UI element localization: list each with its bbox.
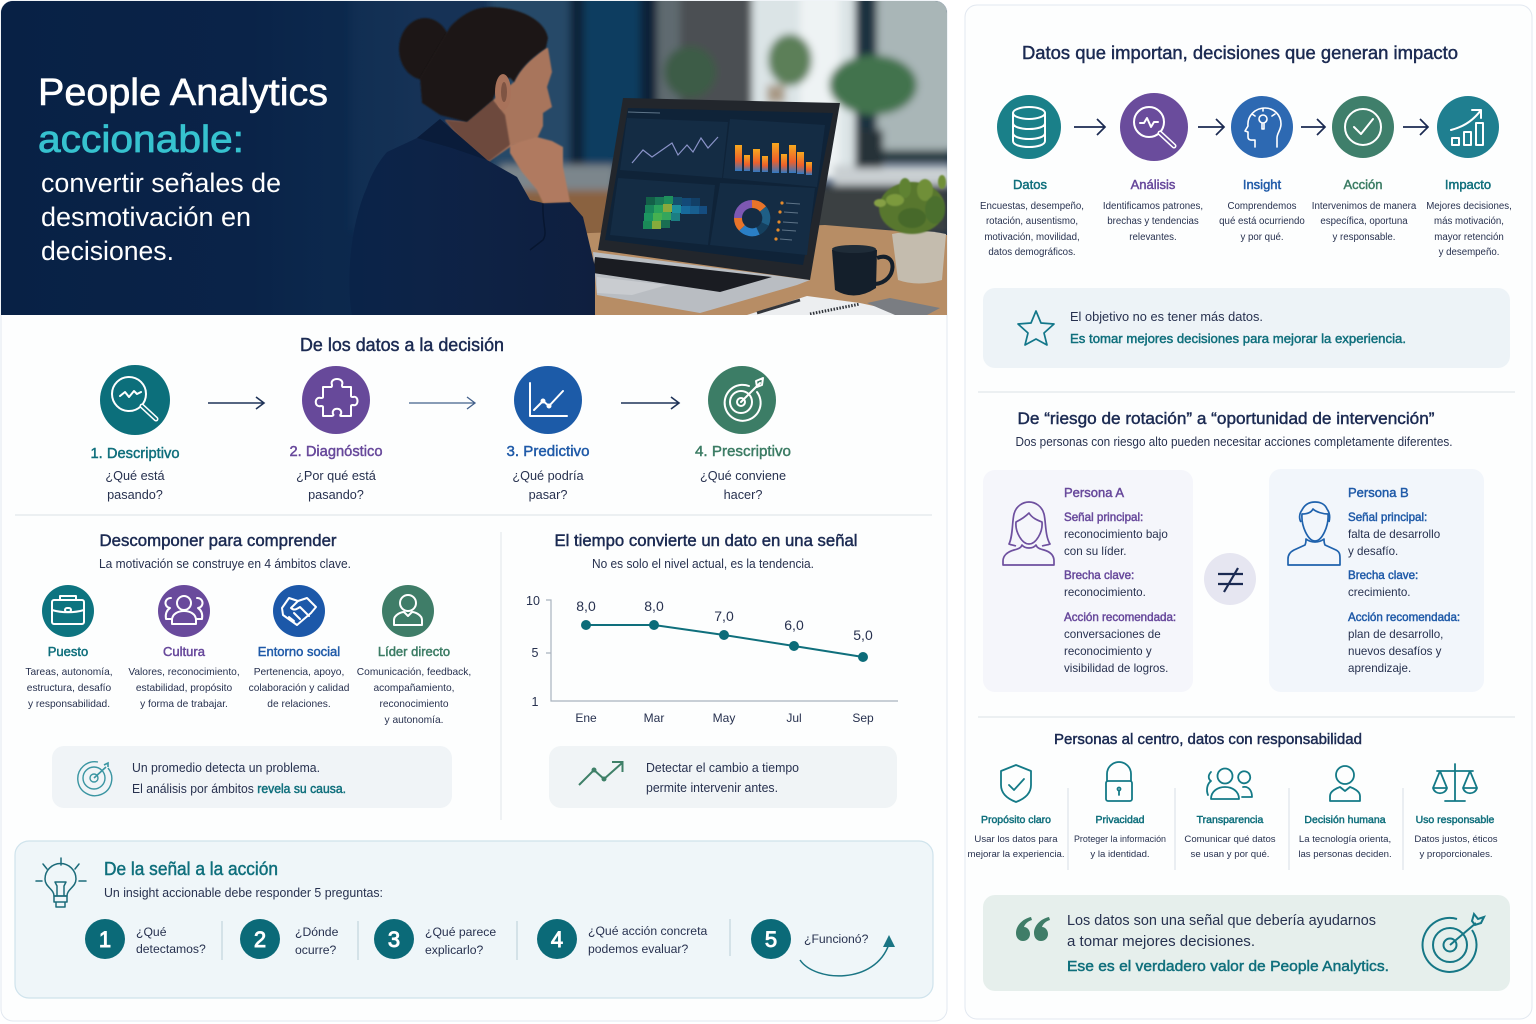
ámbito Líder directo: reconocimiento <box>379 699 449 710</box>
step 3 predictivo: pasar? <box>529 488 567 502</box>
step 1 descriptivo <box>90 365 180 502</box>
line chart: Ene <box>575 711 597 725</box>
icon: not equal <box>1204 553 1256 605</box>
step 1 descriptivo: ¿Qué está <box>105 469 166 483</box>
question 5 <box>751 919 869 959</box>
step 2 diagnóstico: ¿Por qué está <box>296 469 377 483</box>
step Insight: y por qué. <box>1240 232 1284 243</box>
principle Privacidad: Proteger la información <box>1074 834 1166 845</box>
question 4: ¿Qué acción concreta <box>588 924 707 938</box>
panel: Persona A: visibilidad de logros. <box>1064 662 1168 675</box>
heading: Descomponer para comprender <box>100 532 337 550</box>
arrow <box>1074 119 1105 135</box>
panel: Persona B <box>1269 469 1484 692</box>
step 4 prescriptivo <box>695 366 791 502</box>
step Análisis: Identificamos patrones, <box>1103 201 1203 212</box>
step Impacto: Impacto <box>1445 177 1491 192</box>
step Acción: Intervenimos de manera <box>1312 201 1417 212</box>
hair <box>399 18 451 80</box>
ámbito Puesto <box>25 585 113 710</box>
icon: quotes <box>1016 917 1050 941</box>
table <box>587 225 947 315</box>
arrow <box>1403 119 1428 135</box>
woman <box>349 7 595 316</box>
title: accionable: <box>38 119 244 161</box>
section: Descomponer para comprender <box>25 532 471 808</box>
principle Transparencia: Transparencia <box>1197 814 1264 826</box>
title: convertir señales de <box>41 168 281 198</box>
line chart <box>526 594 898 725</box>
question 4: podemos evaluar? <box>588 942 688 956</box>
ámbito Entorno social: Entorno social <box>258 644 340 659</box>
step 1 descriptivo: pasando? <box>107 488 163 502</box>
panel: Persona B: crecimiento. <box>1348 586 1410 599</box>
step Acción: Acción <box>1343 177 1383 192</box>
ámbito Entorno social: colaboración y calidad <box>249 683 350 694</box>
heading: riesgo de rotación: Dos personas con riesgo alto pueden necesitar acciones completamente diferentes. <box>1016 435 1452 449</box>
callout: objetivo: Es tomar mejores decisiones para mejorar la experiencia. <box>1070 331 1406 346</box>
panel: Persona A: conversaciones de <box>1064 628 1161 641</box>
question 3: 3 <box>388 927 400 952</box>
step Análisis: brechas y tendencias <box>1107 216 1199 227</box>
callout: promedio <box>52 746 452 808</box>
question 1: ¿Qué <box>136 925 167 939</box>
ámbito Puesto: Tareas, autonomía, <box>25 667 113 678</box>
section: Descomponer para comprender: La motivación se construye en 4 ámbitos clave. <box>99 557 351 571</box>
line chart: Jul <box>786 711 802 725</box>
step 2 diagnóstico: 2. Diagnóstico <box>290 443 382 460</box>
jacket <box>349 119 595 316</box>
panel: left card <box>1 1 947 1021</box>
step 4 prescriptivo: 4. Prescriptivo <box>695 443 791 460</box>
line chart: 10 <box>526 594 540 608</box>
line chart: 1 <box>532 695 539 709</box>
principle Privacidad: Privacidad <box>1095 814 1145 826</box>
principle Uso responsable: Uso responsable <box>1416 814 1495 826</box>
heading: riesgo de rotación: De “riesgo de rotación” a “oportunidad de intervención” <box>1018 409 1435 428</box>
section: El tiempo convierte un dato: No es solo el nivel actual, es la tendencia. <box>592 557 814 571</box>
line chart: 5,0 <box>853 627 873 643</box>
panel: Persona A <box>983 470 1193 692</box>
question 3: ¿Qué parece <box>425 925 496 939</box>
principle Propósito claro: Usar los datos para <box>974 834 1058 845</box>
step Datos: Datos <box>1013 177 1047 192</box>
panel: Persona B: Brecha clave: <box>1348 569 1418 582</box>
question 1: detectamos? <box>136 942 206 956</box>
principle Privacidad: y la identidad. <box>1090 849 1150 860</box>
step Impacto: Mejores decisiones, <box>1426 201 1512 212</box>
ámbito Líder directo <box>357 585 471 726</box>
callout: detectar <box>549 746 897 808</box>
step Insight <box>1219 96 1305 243</box>
ámbito Líder directo: y autonomía. <box>385 715 443 726</box>
panel: De la señal a la acción <box>15 841 933 998</box>
panel: Persona A: Señal principal: <box>1064 511 1143 524</box>
arrow <box>409 397 475 409</box>
ámbito Líder directo: Comunicación, feedback, <box>357 667 471 678</box>
panel: Persona B: nuevos desafíos y <box>1348 645 1442 658</box>
step Datos <box>980 95 1084 258</box>
question 5: 5 <box>765 927 777 952</box>
question 4 <box>537 919 707 959</box>
step Datos: datos demográficos. <box>988 247 1076 258</box>
callout: objetivo <box>983 288 1510 368</box>
panel: Persona B: Persona B <box>1348 485 1409 500</box>
question 2: ocurre? <box>295 943 337 957</box>
step Análisis: Análisis <box>1131 177 1176 192</box>
principle Transparencia: Comunicar qué datos <box>1184 834 1276 845</box>
step Acción <box>1312 96 1417 243</box>
principle Uso responsable: Datos justos, éticos <box>1414 834 1498 845</box>
principle Propósito claro: mejorar la experiencia. <box>968 849 1064 860</box>
step Insight: qué está ocurriendo <box>1219 216 1305 227</box>
step Insight: Comprendemos <box>1228 201 1297 212</box>
ámbito Cultura: y forma de trabajar. <box>140 699 228 710</box>
plant <box>874 175 946 284</box>
line chart: 7,0 <box>714 608 734 624</box>
callout: cita final <box>983 895 1510 991</box>
callout: promedio: El análisis por ámbitos revela su causa. <box>132 782 346 796</box>
question 2: 2 <box>254 927 266 952</box>
ámbito Cultura: Cultura <box>163 644 206 659</box>
panel: De la señal a la acción: De la señal a la acción <box>104 859 278 879</box>
callout: promedio: Un promedio detecta un problema. <box>132 761 320 775</box>
ámbito Cultura: Valores, reconocimiento, <box>128 667 240 678</box>
panel: Persona B: Señal principal: <box>1348 511 1427 524</box>
mug <box>832 245 893 296</box>
line chart: 8,0 <box>576 598 596 614</box>
line chart: Sep <box>852 711 874 725</box>
callout: cita final: Los datos son una señal que debería ayudarnos <box>1067 913 1376 929</box>
line chart: 6,0 <box>784 617 804 633</box>
panel: Persona A: con su líder. <box>1064 545 1127 558</box>
panel: Persona B: y desafío. <box>1348 545 1398 558</box>
arrow <box>208 397 264 409</box>
step Insight: Insight <box>1243 177 1282 192</box>
title: decisiones. <box>41 236 174 266</box>
callout: objetivo: El objetivo no es tener más datos. <box>1070 309 1263 324</box>
heading: El tiempo convierte un dato en una señal <box>554 532 858 550</box>
step 2 diagnóstico: pasando? <box>308 488 364 502</box>
panel: Persona A: Persona A <box>1064 485 1124 500</box>
question 3: explicarlo? <box>425 943 483 957</box>
heading: right panel title: Datos que importan, decisiones que generan impacto <box>1022 43 1458 63</box>
title <box>38 72 328 266</box>
step 4 prescriptivo: ¿Qué conviene <box>700 469 786 483</box>
question 2: ¿Dónde <box>295 925 339 939</box>
hero banner <box>0 0 957 316</box>
heading: De los datos a la decisión <box>300 335 504 355</box>
ámbito Entorno social <box>249 585 350 710</box>
step Datos: motivación, movilidad, <box>984 232 1080 243</box>
principle Decisión humana: Decisión humana <box>1304 814 1386 826</box>
heading: riesgo de rotación <box>1016 409 1452 449</box>
step 3 predictivo <box>506 366 590 502</box>
section: Personas al centro <box>968 731 1498 870</box>
ámbito Entorno social: Pertenencia, apoyo, <box>254 667 344 678</box>
line chart: Mar <box>644 711 664 725</box>
hand <box>510 137 570 203</box>
step Acción: y responsable. <box>1332 232 1396 243</box>
callout: detectar: Detectar el cambio a tiempo <box>646 761 799 775</box>
icon: target <box>1423 914 1484 972</box>
principle Transparencia: se usan y por qué. <box>1191 849 1269 860</box>
laptop <box>593 98 840 313</box>
notebook <box>747 296 940 315</box>
step 1 descriptivo: 1. Descriptivo <box>90 445 180 462</box>
principle Decisión humana <box>1298 766 1392 860</box>
ámbito Líder directo: acompañamiento, <box>374 683 454 694</box>
line chart: 5 <box>532 646 539 660</box>
step Impacto <box>1426 96 1512 258</box>
arrow <box>621 397 679 409</box>
panel: Persona A: reconocimiento. <box>1064 586 1146 599</box>
principle Propósito claro <box>968 765 1064 860</box>
ámbito Líder directo: Líder directo <box>378 644 450 659</box>
principle Uso responsable: y proporcionales. <box>1419 849 1493 860</box>
panel: Persona A: Brecha clave: <box>1064 569 1134 582</box>
principle Decisión humana: las personas deciden. <box>1298 849 1392 860</box>
question 3 <box>374 919 496 959</box>
ámbito Puesto: y responsabilidad. <box>28 699 110 710</box>
arrow: cycle <box>800 935 895 976</box>
question 2 <box>240 919 339 959</box>
title: desmotivación en <box>41 202 251 232</box>
step Análisis <box>1103 93 1203 243</box>
ámbito Cultura <box>128 585 240 710</box>
step 2 diagnóstico <box>290 366 382 502</box>
ámbito Puesto: Puesto <box>48 644 88 659</box>
panel: Persona A: Acción recomendada: <box>1064 611 1176 624</box>
question 4: 4 <box>551 927 563 952</box>
callout: cita final: Ese es el verdadero valor de People Analytics. <box>1067 959 1389 975</box>
principle Decisión humana: La tecnología orienta, <box>1299 834 1391 845</box>
heading: Personas al centro, datos con responsabilidad <box>1054 731 1362 748</box>
principle Uso responsable <box>1414 764 1498 860</box>
arrow <box>1301 119 1325 135</box>
step 4 prescriptivo: hacer? <box>724 488 762 502</box>
step Impacto: más motivación, <box>1434 216 1504 227</box>
step 3 predictivo: ¿Qué podría <box>512 469 585 483</box>
step Acción: específica, oportuna <box>1320 216 1408 227</box>
step Impacto: y desempeño. <box>1439 247 1499 258</box>
panel: Persona B: falta de desarrollo <box>1348 528 1440 541</box>
title: People Analytics <box>38 72 328 114</box>
panel: Persona B: aprendizaje. <box>1348 662 1411 675</box>
line chart: May <box>713 711 735 725</box>
icon: light bulb <box>36 858 86 907</box>
panel: Persona A: reconocimiento y <box>1064 645 1152 658</box>
step Análisis: relevantes. <box>1129 232 1177 243</box>
ámbito Cultura: estabilidad, propósito <box>136 683 232 694</box>
line chart: 8,0 <box>644 598 664 614</box>
question 5: ¿Funcionó? <box>804 932 869 946</box>
panel: Persona A: reconocimiento bajo <box>1064 528 1168 541</box>
ámbito Puesto: estructura, desafío <box>27 683 112 694</box>
principle Propósito claro: Propósito claro <box>981 814 1051 826</box>
panel: right card <box>965 5 1532 1019</box>
step 3 predictivo: 3. Predictivo <box>506 443 590 460</box>
principle Privacidad <box>1074 762 1166 860</box>
panel: Persona B: Acción recomendada: <box>1348 611 1460 624</box>
question 1: 1 <box>99 927 111 952</box>
ámbito Entorno social: de relaciones. <box>267 699 331 710</box>
section: De los datos a la decisión <box>90 335 791 502</box>
callout: cita final: a tomar mejores decisiones. <box>1067 934 1255 950</box>
arrow <box>1198 119 1224 135</box>
panel: De la señal a la acción: Un insight accionable debe responder 5 preguntas: <box>104 886 383 900</box>
panel: Persona B: plan de desarrollo, <box>1348 628 1443 641</box>
step Impacto: mayor retención <box>1434 232 1504 243</box>
step Datos: Encuestas, desempeño, <box>980 201 1084 212</box>
question 1 <box>85 919 206 959</box>
step Datos: rotación, ausentismo, <box>986 216 1078 227</box>
neck and face <box>445 48 552 162</box>
section: El tiempo convierte un dato <box>526 532 898 808</box>
principle Transparencia <box>1184 768 1276 860</box>
process flow <box>980 93 1512 258</box>
callout: detectar: permite intervenir antes. <box>646 781 778 795</box>
